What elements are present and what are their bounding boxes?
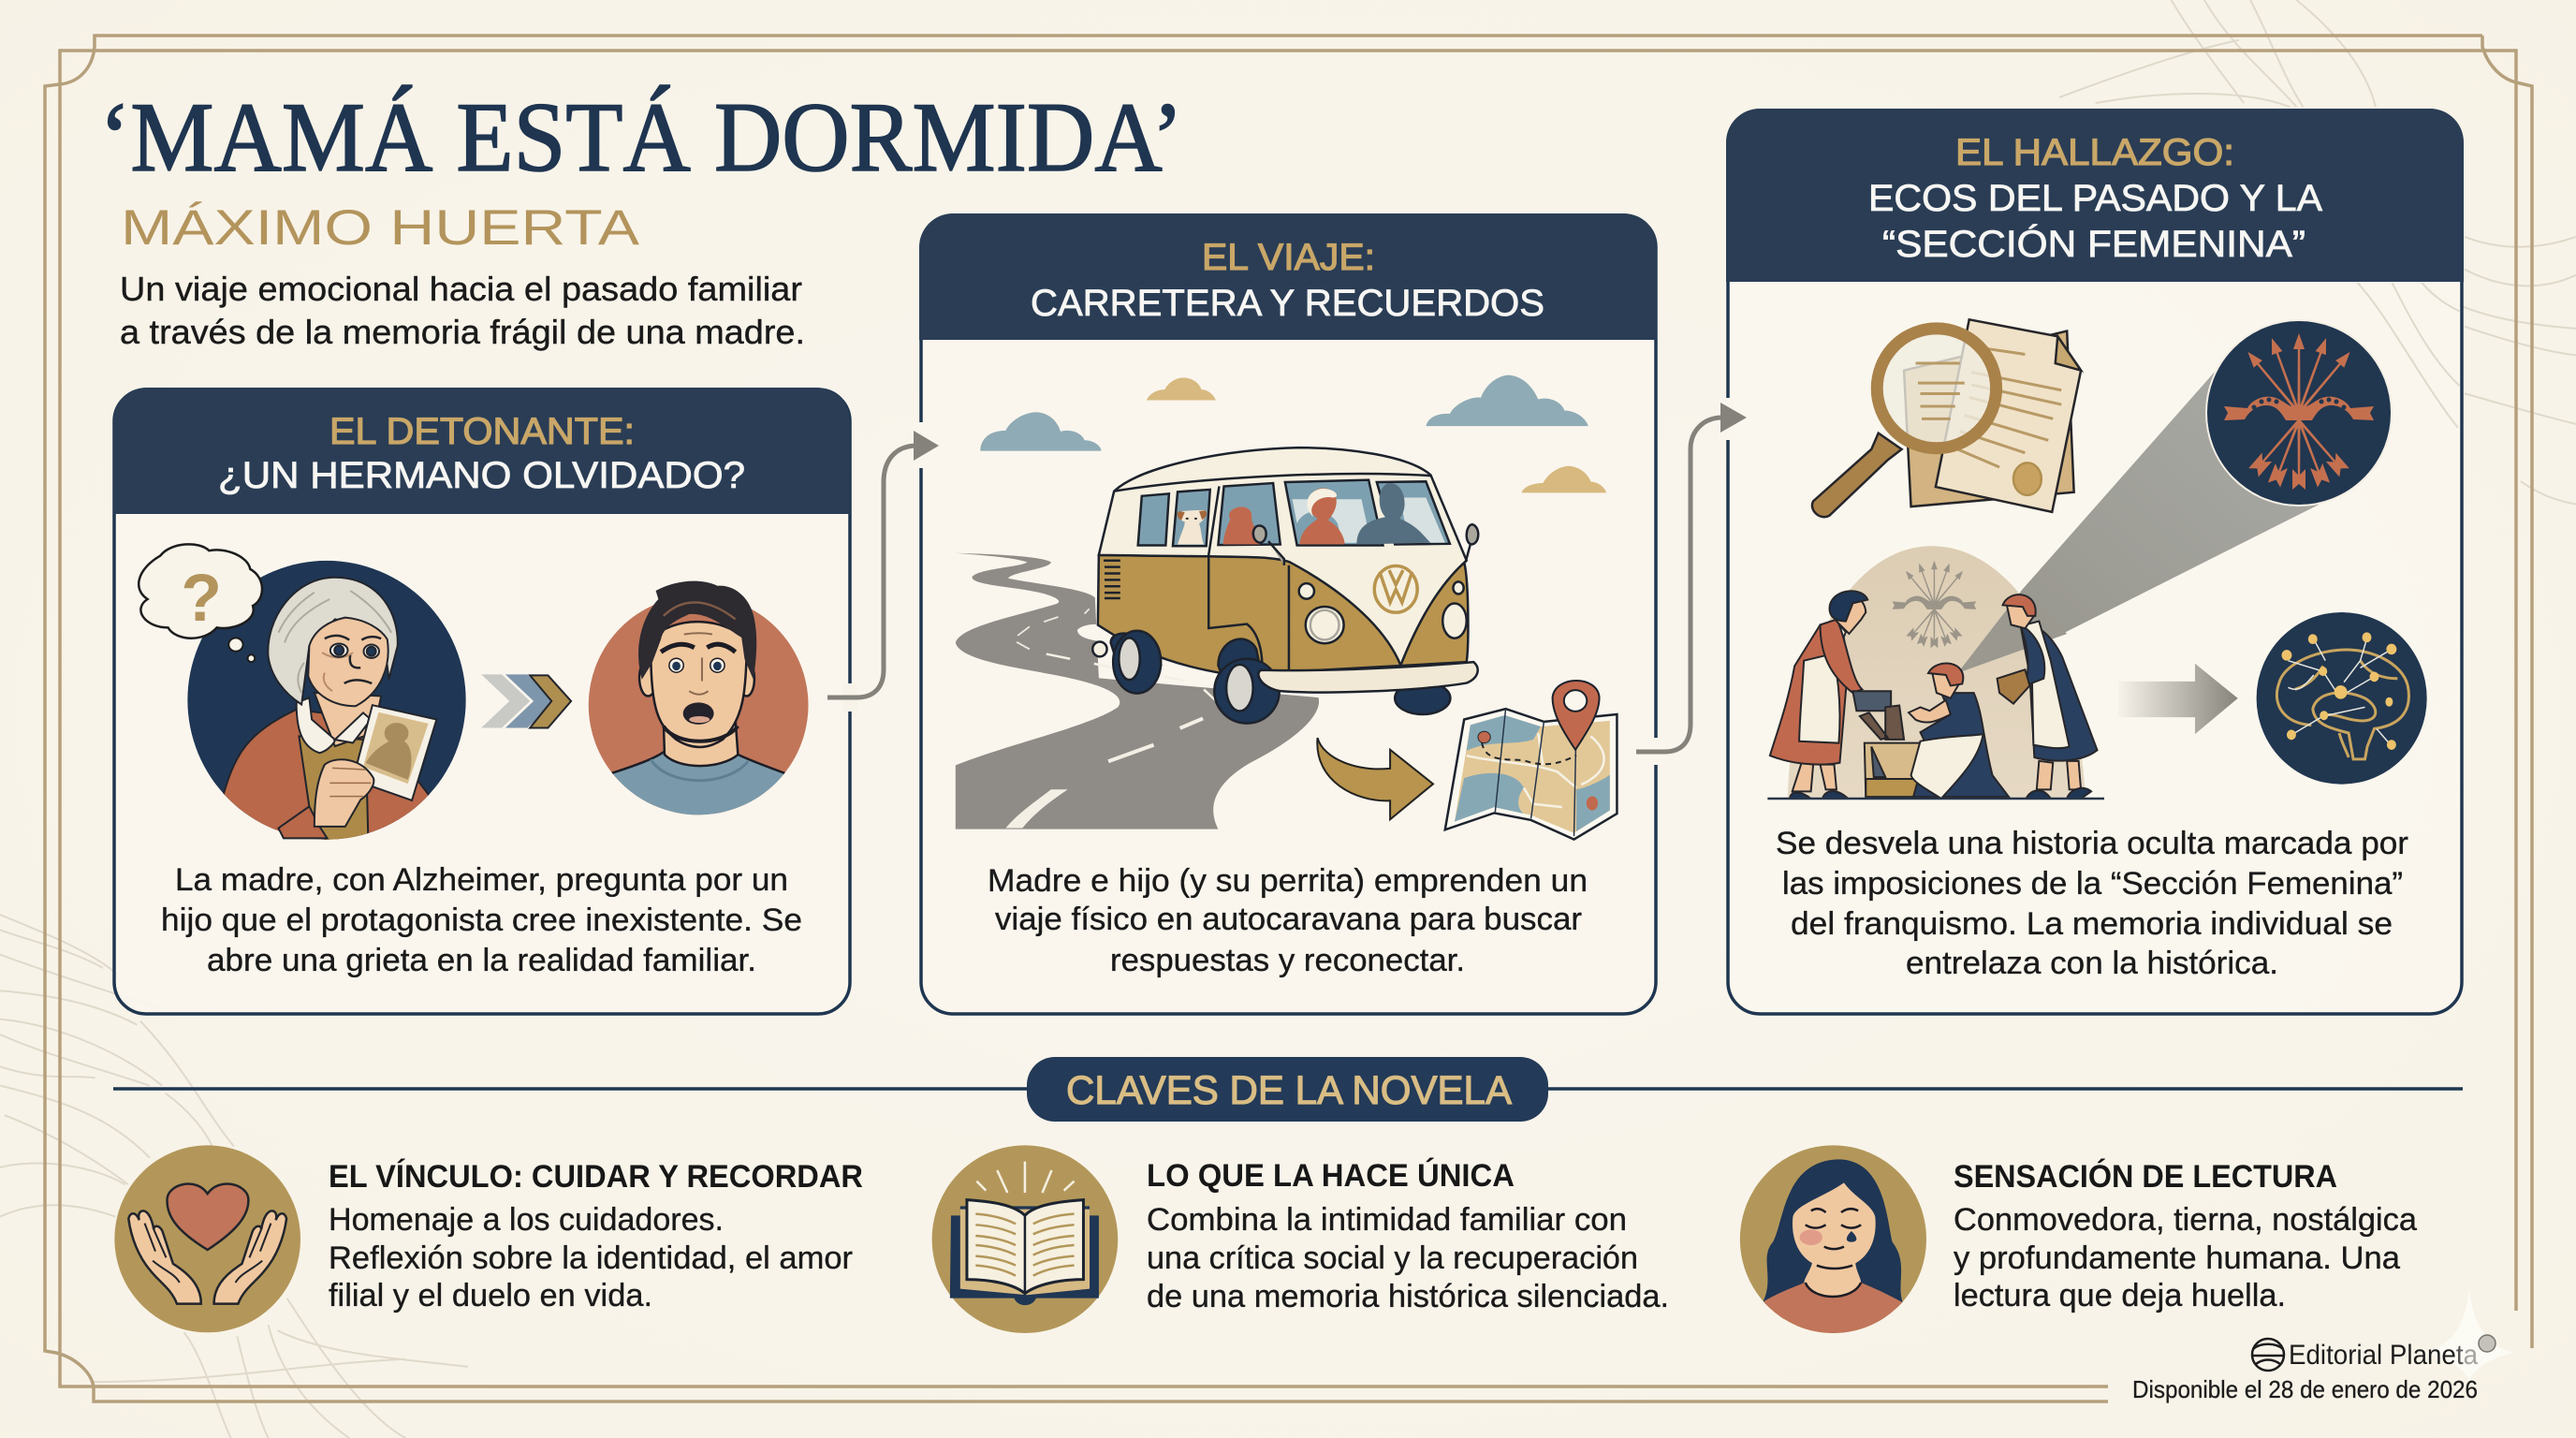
roof line xyxy=(1114,474,1430,492)
panel 1 text: abre una grieta en la realidad familiar. xyxy=(207,943,756,978)
intro text xyxy=(120,270,805,351)
publisher logo xyxy=(2252,1339,2284,1371)
magnifier lens xyxy=(1882,333,1991,443)
author subtitle: MÁXIMO HUERTA xyxy=(121,200,640,256)
lamps xyxy=(1092,581,1467,656)
camper van xyxy=(1092,448,1478,724)
intro text: Un viaje emocional hacia el pasado familiar xyxy=(120,270,802,308)
VW logo xyxy=(1374,566,1417,612)
clave 2 text: Combina la intimidad familiar con xyxy=(1147,1202,1627,1238)
panel 3 header xyxy=(1726,109,2464,282)
panel 3 heading: ECOS DEL PASADO Y LA xyxy=(1868,178,2322,219)
panel 2 text: respuestas y reconectar. xyxy=(1110,943,1465,978)
icon: open book xyxy=(932,1145,1118,1333)
sparkle xyxy=(2425,1287,2513,1381)
brain icon xyxy=(2257,612,2427,785)
claves pill heading: CLAVES DE LA NOVELA xyxy=(1066,1068,1512,1113)
clave 3 text: Conmovedora, tierna, nostálgica xyxy=(1954,1202,2417,1238)
connector arrow 2 xyxy=(1636,398,1747,765)
mirrors xyxy=(1253,524,1478,565)
panel 3 text: entrelaza con la histórica. xyxy=(1906,946,2278,981)
panel 1 text xyxy=(161,862,802,978)
claves pill heading xyxy=(1027,1057,1548,1122)
clave 1 heading: EL VÍNCULO: CUIDAR Y RECORDAR xyxy=(329,1159,863,1195)
panel 3 heading: “SECCIÓN FEMENINA” xyxy=(1882,223,2305,265)
beam over arch xyxy=(1957,589,2067,673)
panel: el hallazgo xyxy=(1726,109,2464,1014)
thought bubble with question mark: ? xyxy=(181,562,222,636)
clave 2 heading: LO QUE LA HACE ÚNICA xyxy=(1147,1158,1515,1194)
background swirl bottom left xyxy=(0,915,468,1438)
woman kneeling xyxy=(1909,663,2009,799)
panel 3 text: las imposiciones de la “Sección Femenina” xyxy=(1782,866,2403,902)
woman left xyxy=(1770,591,1891,799)
arch background with women xyxy=(1767,546,2104,799)
curved arrow to map xyxy=(1317,738,1433,819)
windows xyxy=(1138,480,1450,546)
panel 2 text: viaje físico en autocaravana para buscar xyxy=(995,902,1582,937)
clave 3 heading: SENSACIÓN DE LECTURA xyxy=(1954,1159,2337,1195)
panel: el detonante xyxy=(113,388,850,1014)
magnifier handle xyxy=(1812,433,1902,517)
panel 1 text: La madre, con Alzheimer, pregunta por un xyxy=(175,862,788,898)
panel 3 heading: EL HALLAZGO: xyxy=(1955,132,2234,173)
illustration: magnifier over documents xyxy=(1812,319,2081,517)
box and tools xyxy=(1860,705,1920,797)
clave 2 text: de una memoria histórica silenciada. xyxy=(1147,1279,1669,1314)
clave 3 xyxy=(1740,1145,2417,1336)
woman right xyxy=(1998,594,2098,799)
van cream upper body xyxy=(1099,448,1467,666)
panel 2 header xyxy=(919,213,1657,340)
watermark emblem xyxy=(1893,561,1976,648)
rear wheel xyxy=(1111,631,1161,694)
panel 2 heading xyxy=(1031,237,1544,324)
clave 1 text: Homenaje a los cuidadores. xyxy=(329,1202,724,1238)
clave 1 text: Reflexión sobre la identidad, el amor xyxy=(329,1240,853,1276)
panel 1 heading xyxy=(218,411,745,496)
front left wheel xyxy=(1214,638,1280,724)
intro text: a través de la memoria frágil de una madre. xyxy=(120,313,805,351)
map pin xyxy=(1553,681,1600,750)
chevrons xyxy=(481,674,571,727)
panel 1 header xyxy=(113,388,850,514)
clave 2 text xyxy=(1147,1202,1669,1314)
connector arrow 1 xyxy=(827,422,939,712)
map with pin xyxy=(1445,681,1617,840)
clave 1 text xyxy=(329,1202,853,1313)
van gold body xyxy=(1098,555,1468,673)
illustration: surprised son xyxy=(589,581,812,820)
thought bubble with question mark xyxy=(139,544,262,662)
panel: el viaje xyxy=(919,213,1657,1014)
panel 2 text xyxy=(988,863,1588,978)
passengers xyxy=(1178,483,1430,544)
panel 1 body xyxy=(114,389,850,1014)
claves divider line xyxy=(113,1087,2463,1091)
panel 3 body xyxy=(1728,110,2462,1014)
clave 2 xyxy=(932,1145,1669,1333)
panel 2 text: Madre e hijo (y su perrita) emprenden un xyxy=(988,863,1588,899)
right front wheel xyxy=(1395,682,1450,714)
light window reflections xyxy=(1293,498,1445,543)
arch xyxy=(1788,546,2086,799)
panel 3 heading xyxy=(1868,132,2322,265)
panel 3 text xyxy=(1776,826,2408,981)
swirl inside panel 3 xyxy=(2358,283,2460,428)
bumper xyxy=(1258,662,1478,692)
clave 1 text: filial y el duelo en vida. xyxy=(329,1278,652,1313)
publisher block xyxy=(2132,1287,2513,1403)
panel 1 heading: EL DETONANTE: xyxy=(329,411,635,452)
publisher name: Editorial Planeta xyxy=(2289,1340,2478,1371)
panel 2 heading: EL VIAJE: xyxy=(1202,237,1375,278)
small globe mark xyxy=(2479,1335,2496,1352)
photo held by mother xyxy=(278,705,436,838)
light beam xyxy=(1957,371,2319,673)
illustration: mother with photo xyxy=(187,561,466,844)
panel 3 text: Se desvela una historia oculta marcada por xyxy=(1776,826,2408,861)
clave 3 text xyxy=(1954,1202,2417,1313)
icon: woman with tear xyxy=(1740,1145,1926,1336)
availability date: Disponible el 28 de enero de 2026 xyxy=(2132,1375,2478,1403)
clave 3 text: lectura que deja huella. xyxy=(1954,1278,2286,1313)
clave 1 xyxy=(114,1145,863,1332)
winding road xyxy=(956,553,1319,829)
clouds xyxy=(980,375,1606,492)
gradient arrow xyxy=(2118,664,2238,734)
panel 2 body xyxy=(921,215,1656,1014)
panel 1 heading: ¿UN HERMANO OLVIDADO? xyxy=(218,455,745,496)
emblem circle xyxy=(2206,320,2392,506)
icon: hands with heart xyxy=(114,1145,300,1332)
clave 3 text: y profundamente humana. Una xyxy=(1954,1240,2400,1276)
ground line xyxy=(1767,798,2104,800)
title: ‘MAMÁ ESTÁ DORMIDA’ xyxy=(99,82,1183,192)
panel 1 text: hijo que el protagonista cree inexistente. Se xyxy=(161,902,802,938)
background swirl top right xyxy=(2059,0,2576,505)
panel 3 text: del franquismo. La memoria individual se xyxy=(1791,906,2393,942)
magnifier rim xyxy=(1877,329,1997,448)
panel 2 heading: CARRETERA Y RECUERDOS xyxy=(1031,283,1544,324)
door lines xyxy=(1104,486,1289,670)
clave 2 text: una crítica social y la recuperación xyxy=(1147,1240,1638,1276)
